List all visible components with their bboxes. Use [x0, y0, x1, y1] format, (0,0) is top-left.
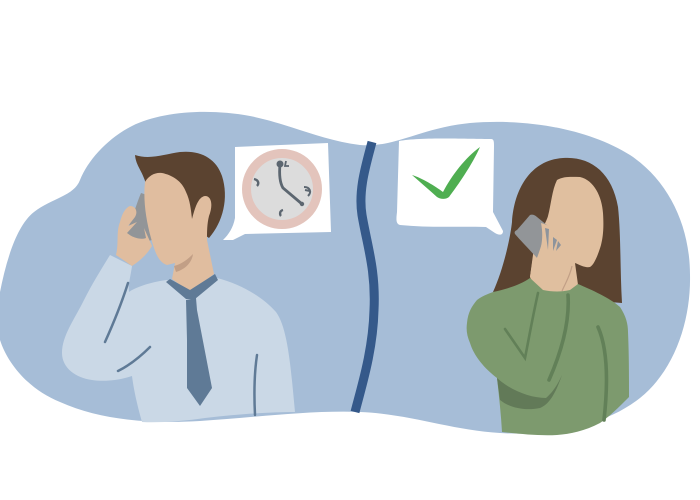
- sleeve shadow: [497, 375, 562, 409]
- icon: check mark: [412, 147, 480, 199]
- man phone: [125, 193, 152, 243]
- man collar: [166, 274, 218, 299]
- woman wrist line: [562, 266, 572, 291]
- divider wave: [355, 142, 374, 412]
- background blob: [0, 112, 690, 434]
- bubble shape: [223, 143, 331, 240]
- man hand: [116, 206, 152, 266]
- bubble shape: [396, 138, 503, 235]
- icon: clock: [246, 154, 318, 224]
- woman sweater: [467, 278, 629, 435]
- woman hand: [530, 223, 575, 292]
- speech bubble: clock: [223, 143, 331, 240]
- man neck and face: [144, 173, 214, 292]
- panel: woman: [467, 158, 629, 435]
- woman hair: [493, 158, 622, 303]
- man chin shadow: [174, 254, 193, 272]
- woman phone: [515, 215, 548, 258]
- woman finger shadows: [545, 228, 561, 251]
- shirt fold lines: [105, 283, 257, 415]
- speech bubble: check mark: [396, 138, 503, 235]
- man shirt: [62, 255, 295, 422]
- woman face and neck: [530, 177, 603, 294]
- panel: man: [62, 152, 295, 422]
- sweater fold lines: [505, 293, 606, 420]
- man tie: [186, 298, 212, 406]
- man hair: [135, 152, 225, 238]
